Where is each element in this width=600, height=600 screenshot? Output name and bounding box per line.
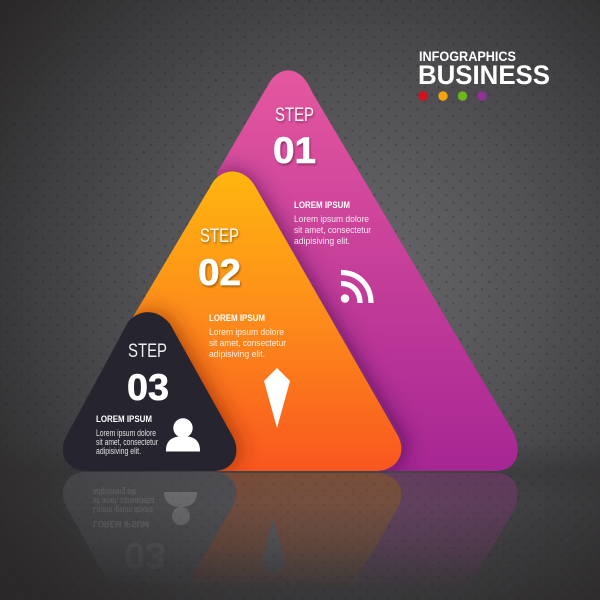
title block [418, 48, 550, 90]
step 01 text block: sit amet, consectetur [294, 225, 371, 235]
step 03 text block [96, 414, 158, 456]
step 03 label: STEP [128, 340, 167, 362]
step 02 text block: sit amet, consectetur [209, 338, 286, 348]
step 01 number: 01 [273, 130, 316, 171]
step 01 text block: adipisiving elit. [294, 236, 350, 246]
shadow of triangle 03 on triangle 02 [133, 299, 251, 471]
step 02 text block: Lorem ipsum dolore [209, 327, 284, 337]
step 02 number: 02 [198, 252, 241, 293]
step 03 text block: Lorem ipsum dolore [96, 428, 156, 438]
icon: rss feed [341, 272, 371, 303]
step 01 text block: Lorem ipsum dolore [294, 214, 369, 224]
legend colour dots [418, 91, 487, 101]
step 03 text block: LOREM IPSUM [96, 414, 152, 424]
reflection of triangles: Lorem ipsum dolore [93, 505, 153, 515]
icon: person [166, 418, 200, 452]
reflection of triangles: adipisiving elit. [93, 487, 138, 497]
step 02 text block: adipisiving elit. [209, 349, 265, 359]
step 01 text block: LOREM IPSUM [294, 200, 350, 210]
reflection of triangles: 03 [124, 535, 166, 576]
step 02 label: STEP [200, 225, 239, 247]
triangle step 03 [63, 312, 236, 471]
reflection of triangles: LOREM IPSUM [93, 519, 149, 529]
icon: kite [264, 368, 290, 428]
title: business: BUSINESS [418, 60, 550, 90]
reflection of triangles: sit amet, consectetur [93, 496, 155, 506]
step 01 text block [294, 200, 371, 246]
step 02 text block [209, 313, 286, 359]
step 01 label: STEP [275, 104, 314, 126]
step 03 text block: sit amet, consectetur [96, 437, 158, 447]
triangle step 02 [132, 172, 402, 471]
title: infographics: INFOGRAPHICS [419, 48, 516, 64]
triangle step 01 [217, 70, 518, 471]
shadow of triangle 02 on triangle 01 [217, 158, 418, 471]
reflection of triangles [63, 472, 518, 578]
step 03 text block: adipisiving elit. [96, 446, 141, 456]
step 02 text block: LOREM IPSUM [209, 313, 265, 323]
step 03 number: 03 [127, 367, 169, 408]
